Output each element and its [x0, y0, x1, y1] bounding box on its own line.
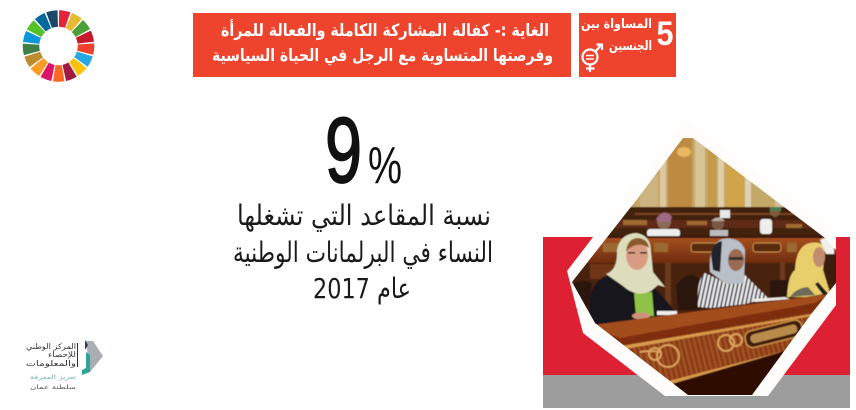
- logo slogan: تعزيز المعرفة: [30, 375, 77, 381]
- icon: gender equality: [582, 44, 602, 72]
- dark base: [673, 350, 784, 395]
- logo country: سلطنة عمان: [30, 385, 76, 391]
- description text: نسبة المقاعد التي تشغلها: [237, 199, 491, 232]
- target text line 1: الغاية :- كفالة المشاركة الكاملة والفعالة للمرأة: [221, 19, 549, 41]
- nameplate: [744, 319, 804, 349]
- white frame polygon: [567, 117, 836, 396]
- target text line 2: وفرصتها المتساوية مع الرجل في الحياة السياسية: [212, 46, 553, 66]
- hijab: [606, 233, 665, 294]
- back benches: [608, 206, 824, 237]
- jacket: [588, 274, 675, 325]
- carved ornaments: [640, 334, 742, 367]
- green top: [634, 292, 654, 316]
- chandelier: [677, 147, 691, 157]
- striped jacket: [698, 273, 768, 308]
- hand and paper: [632, 312, 650, 320]
- description line 3: عام 2017: [313, 272, 411, 305]
- wall: [630, 138, 776, 208]
- woman 3: [787, 238, 834, 297]
- goal title line 1: المساواة بين: [581, 17, 652, 32]
- big number 9%: 9: [325, 98, 362, 202]
- face: [626, 240, 648, 270]
- logo: statistics centre: [26, 340, 103, 391]
- target banner: [193, 13, 571, 77]
- logo mark: [86, 341, 103, 372]
- photo backdrop: red and grey bands: [543, 237, 850, 408]
- yellow hijab: [787, 243, 830, 297]
- SDG colour wheel: [20, 7, 97, 85]
- description line 2: النساء في البرلمانات الوطنية: [233, 236, 493, 269]
- logo text: المركز الوطني: [26, 342, 76, 351]
- white figure behind: [820, 238, 834, 254]
- front desk top: [598, 296, 825, 346]
- woman 1: [588, 233, 677, 325]
- goal number: 5: [656, 15, 674, 53]
- back row people: [656, 220, 672, 229]
- logo text: والمعلومات: [26, 359, 76, 368]
- percent sign: %: [368, 137, 402, 195]
- face: [728, 249, 744, 271]
- description text: [233, 199, 493, 305]
- front desk face: [621, 312, 816, 385]
- paper: [752, 297, 790, 302]
- under panel wood and chairs: [560, 263, 840, 318]
- logo text: للإحصاء: [48, 350, 76, 359]
- face: [813, 247, 825, 267]
- goal title line 2: الجنسين: [609, 39, 652, 54]
- jacket: [790, 287, 815, 297]
- photo: parliament session: [572, 138, 836, 395]
- logo text: [26, 342, 76, 368]
- woman 2: [698, 238, 790, 308]
- front bench panel: [586, 237, 836, 264]
- hijab: [710, 238, 745, 284]
- big number 9%: [325, 98, 402, 202]
- goal 5 badge: [579, 13, 676, 77]
